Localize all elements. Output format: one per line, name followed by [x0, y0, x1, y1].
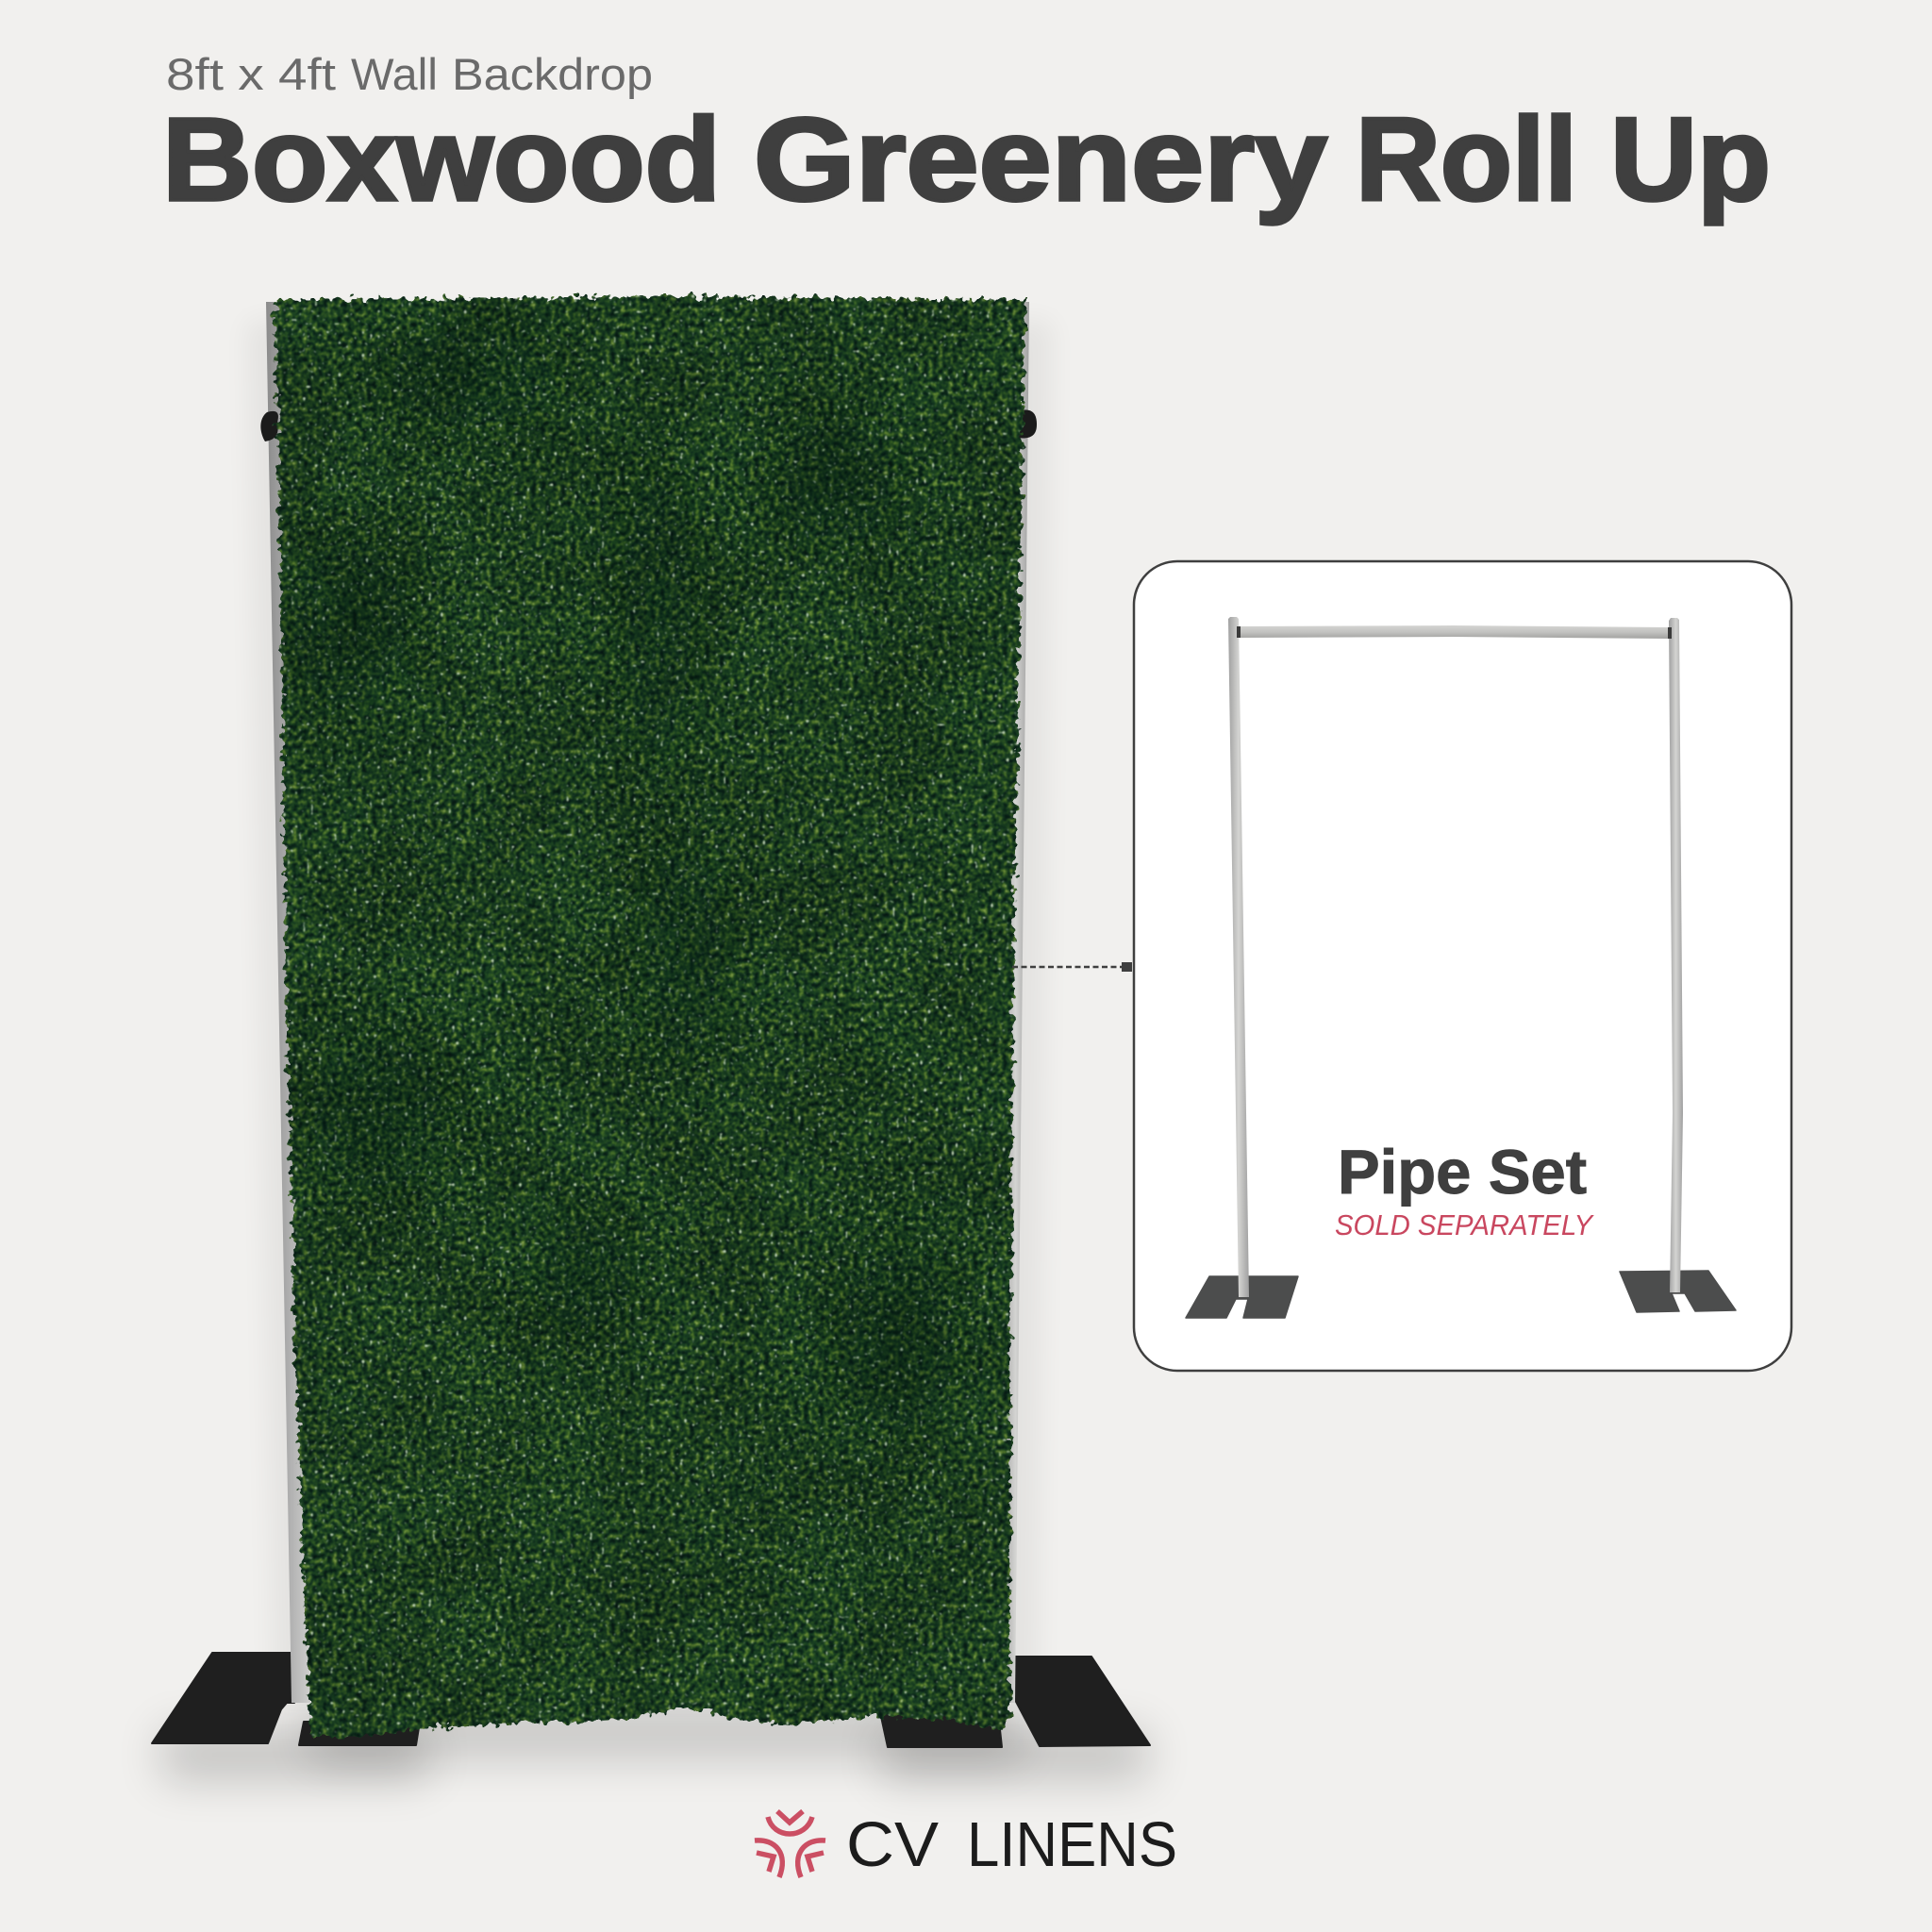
- brand logo: [755, 1809, 1177, 1880]
- right clamp: [1017, 410, 1037, 438]
- logo wordmark: [846, 1809, 1177, 1880]
- connector: dashed line from wall to pipe set: [1012, 962, 1132, 972]
- title: [162, 94, 1771, 225]
- subtitle: [166, 49, 653, 99]
- crossbar: [1240, 625, 1669, 639]
- boxwood hedge panel: [275, 296, 1025, 1738]
- left base plate: [1186, 1276, 1298, 1318]
- panel: pipe set: [1134, 561, 1791, 1371]
- right pipe upright: [1669, 618, 1683, 1292]
- title: Boxwood: [162, 94, 721, 225]
- title: Greenery: [754, 94, 1327, 225]
- left clamp: [260, 411, 278, 441]
- subtitle: 8ft x 4ft: [166, 49, 336, 99]
- logo wordmark: LINENS: [967, 1809, 1177, 1880]
- right base plate: [1620, 1271, 1736, 1312]
- stand base plates: [152, 1653, 1150, 1747]
- subtitle: Wall: [351, 49, 438, 99]
- left upright pole: [266, 302, 310, 1703]
- left pipe upright: [1228, 617, 1249, 1297]
- soft shadow behind wall: [162, 321, 1146, 1778]
- sold separately note: SOLD SEPARATELY: [1335, 1208, 1594, 1241]
- logo wordmark: CV: [846, 1809, 939, 1880]
- greenery wall backdrop: [152, 296, 1150, 1778]
- title: Up: [1610, 94, 1771, 225]
- darker foliage patches: [292, 330, 953, 1434]
- logo icon: [755, 1811, 825, 1877]
- right upright pole: [1002, 302, 1029, 1703]
- subtitle: Backdrop: [452, 49, 653, 99]
- panel heading: Pipe Set: [1338, 1137, 1587, 1207]
- title: Roll: [1356, 94, 1577, 225]
